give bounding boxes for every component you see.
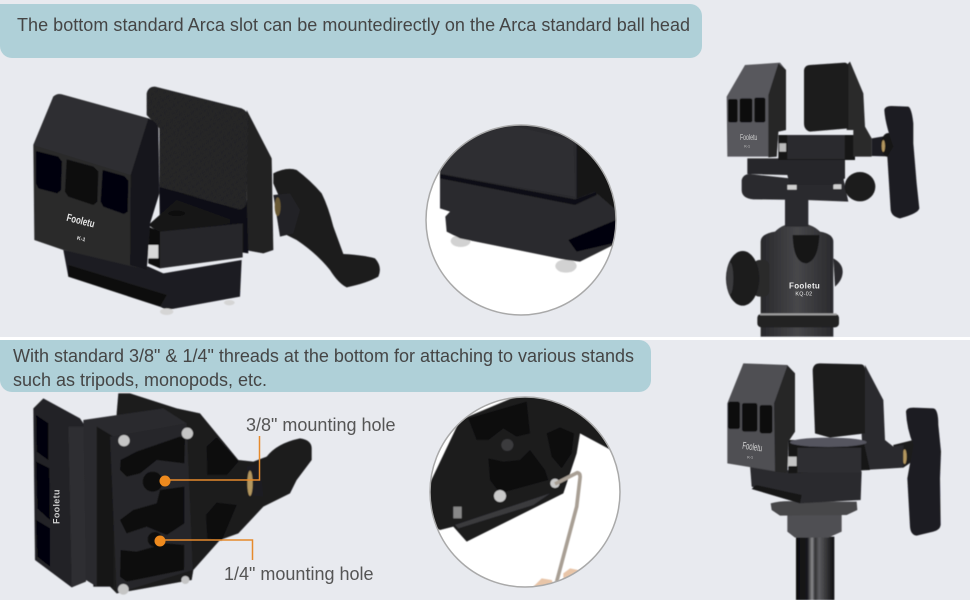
brand: Fooletu KQ-02: Fooletu: [789, 282, 820, 291]
brand: Fooletu KQ-02: [789, 282, 820, 297]
banner: threads caption: With standard 3/8" & 1/4" threads at the bottom for attaching to various stands: [13, 346, 634, 366]
callout: 1/4 inch mounting hole: 1/4" mounting hole: [224, 564, 374, 584]
brand: Fooletu K-1: K-1: [76, 235, 86, 243]
photo: clamp on Arca slot, front three-quarter view: [33, 87, 380, 315]
callout: 3/8 inch mounting hole: 3/8" mounting hole: [246, 415, 396, 435]
brand: Fooletu K-1 small: K-1: [747, 455, 753, 459]
callout: 1/4 inch mounting hole: [154, 536, 374, 584]
brand: Fooletu K-1 small: [740, 133, 757, 149]
photo: clamp mounted on monopod: [727, 363, 941, 600]
brand: Fooletu K-1 small: Fooletu: [742, 440, 763, 454]
callout: 3/8 inch mounting hole: [160, 415, 396, 486]
photo: clamp underside with mounting holes: [33, 393, 312, 595]
banner: Arca slot caption: [0, 4, 702, 58]
banner: threads caption: such as tripods, monopods, etc.: [13, 370, 267, 390]
brand: Fooletu KQ-02: KQ-02: [795, 291, 812, 297]
banner: threads caption: [0, 340, 651, 392]
brand: Fooletu K-1: [65, 212, 96, 243]
photo: clamp mounted on ball head: [726, 62, 919, 337]
inset circle: hex key tightening screw: [427, 393, 623, 590]
inset circle: bottom Arca slot close-up: [426, 120, 620, 315]
brand: Fooletu rotated: Fooletu: [51, 489, 61, 524]
banner: Arca slot caption: The bottom standard Arca slot can be mountedirectly on the Arca standard ball head: [17, 15, 690, 35]
brand: Fooletu K-1 small: Fooletu: [740, 133, 757, 142]
brand: Fooletu K-1 small: K-1: [744, 145, 750, 149]
brand: Fooletu K-1: Fooletu: [65, 212, 96, 230]
